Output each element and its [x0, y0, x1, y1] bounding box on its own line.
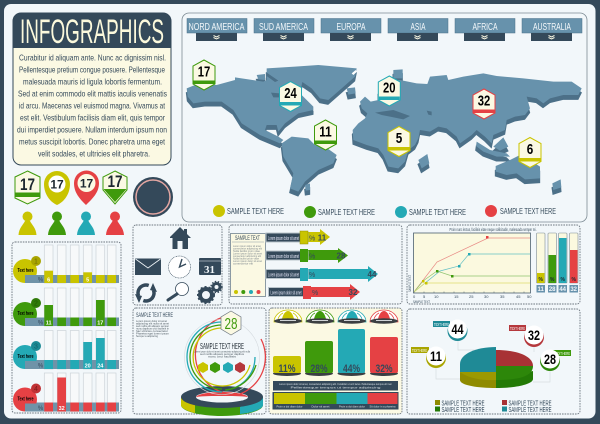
panel: bar rows	[12, 242, 121, 413]
region tabs: AFRICA	[472, 22, 498, 33]
map pin 24	[280, 82, 302, 112]
chart axis labels	[407, 275, 532, 304]
row 2 green: 17	[97, 320, 103, 326]
percent columns	[536, 233, 578, 293]
map pin 20	[378, 76, 400, 106]
ring panel text: Lorem ipsum dolor sit amet	[136, 319, 167, 323]
concentric rings	[184, 318, 265, 394]
caption strip: Proin a dui diam dolor	[276, 404, 303, 408]
intro paragraph: Pellentesque pretium congue posuere. Pellentesque	[19, 64, 165, 74]
chart axis labels: 0	[413, 294, 416, 299]
ring caption: Lorem ipsum dolor sit amet consectetur adipiscing elit nulla	[194, 350, 250, 354]
ring panel text: sed mollis elit aliquam semper	[136, 324, 169, 328]
row 1 yellow: %	[38, 278, 44, 284]
caption strip: Sit dolor in a pharetra	[370, 404, 396, 408]
caption strip: Dolor sit amet	[312, 404, 330, 408]
cylinders	[273, 329, 398, 376]
cylinders: 28%	[310, 363, 328, 375]
row 2 green: %	[38, 320, 44, 326]
percent columns: 11	[538, 287, 545, 293]
caption strip: Pellentesque tempus ut tempor adipiscing	[290, 386, 381, 390]
connector lines	[436, 341, 550, 382]
arrow 11: Lorem ipsum dolor sit amet	[268, 236, 299, 242]
map pin 17	[193, 60, 215, 90]
row 1 yellow: 5	[86, 278, 89, 284]
ring panel text: Semper a adipiscing	[136, 334, 158, 338]
row 2 green: Text here	[18, 311, 34, 317]
icon: teardrop badge yellow	[44, 171, 70, 205]
arrow 32: %	[312, 290, 318, 297]
map pin 6	[519, 138, 541, 168]
icon: person yellow	[18, 212, 36, 235]
icon: hexagon badge green: 17	[20, 175, 35, 194]
arrow 28: Lorem ipsum dolor sit amet	[268, 254, 299, 260]
row 4 red: 32	[59, 406, 65, 412]
icon: hexagon badge green	[15, 171, 40, 204]
arrow 28	[266, 248, 348, 263]
map pin 5	[388, 126, 410, 156]
3d disc	[181, 386, 263, 416]
ring panel text: nunc dapibus orci facilisis in	[136, 326, 169, 330]
ring hexagons	[198, 362, 245, 373]
arrow 11	[266, 229, 330, 245]
chart axis labels: SAMPLE TEXT	[413, 299, 430, 304]
intro paragraph: dui imperdiet posuere. Nullam interdum ipsum non	[17, 124, 167, 134]
cylinders: 44%	[343, 363, 360, 375]
caption strip	[272, 381, 398, 410]
cylinders: 32%	[376, 363, 393, 375]
chart axis labels: 25	[469, 294, 474, 299]
row 4 red: %	[38, 406, 44, 412]
chart axis labels: 10	[434, 294, 439, 299]
row 3 teal: %	[38, 364, 44, 370]
row 4 red	[13, 373, 119, 412]
arrow 44: 44	[368, 270, 377, 279]
panel: pie chart	[407, 309, 580, 414]
icon: clock	[168, 256, 190, 278]
arrow 11: %	[309, 236, 315, 242]
chart axis labels: 15	[454, 294, 459, 299]
pie legend: SAMPLE TEXT HERE	[508, 405, 552, 414]
note card	[230, 234, 266, 296]
eurasia, africa, australia	[352, 69, 582, 194]
map pin 11	[314, 120, 336, 150]
row 3 teal: Text here	[18, 354, 34, 360]
map pin 32	[473, 89, 495, 119]
pie pin 32: 32	[528, 327, 540, 343]
percent columns: %	[571, 277, 576, 283]
pie pin 11	[411, 346, 446, 368]
panel: ring chart	[133, 308, 266, 416]
row 2 green: 11	[46, 320, 52, 326]
panel: world map	[182, 13, 587, 222]
pie legend	[435, 398, 552, 414]
icon: map pin badge red	[74, 171, 99, 205]
title: INFOGRAPHICS	[20, 13, 164, 51]
intro paragraph: velit sodales, et ultricies elit pharetra.	[38, 148, 150, 158]
region tabs: SUD AMERICA	[259, 22, 308, 33]
intro paragraph	[17, 52, 167, 158]
arrow 32	[268, 284, 360, 300]
row 2 green	[13, 288, 119, 326]
ring caption: sed mollis aliquam semper dapibus	[200, 352, 245, 356]
domes	[274, 310, 398, 324]
arrow 44	[266, 266, 378, 282]
note card: Lorem ipsum dolor sit amet	[233, 259, 262, 263]
world map continents	[186, 65, 582, 196]
region tabs	[187, 18, 582, 41]
ring panel text: adipiscing elit nulla sit amet	[136, 322, 169, 326]
icon: home	[170, 227, 191, 249]
ring panel text: hac ultricies consectetur	[136, 329, 168, 333]
icon: person teal	[77, 212, 95, 235]
chart axis labels: 30	[484, 294, 489, 299]
row 1 yellow	[13, 245, 119, 284]
arrow 44: Lorem ipsum dolor sit amet	[268, 272, 299, 278]
intro paragraph: malesuada mauris id ligula lobortis fermentum.	[23, 76, 162, 86]
3d pie	[460, 347, 533, 388]
pie pin 28	[540, 350, 571, 371]
note card: consectetur elit	[233, 262, 253, 266]
pie pin 11: 11	[430, 348, 442, 364]
chart heading: Proin nunc lectus, facilisis vitae neque sollicitudin, malesuada semper mi.	[450, 227, 536, 232]
region tabs: ASIA	[410, 22, 426, 33]
map legend	[213, 205, 556, 218]
icon: refresh	[135, 283, 157, 303]
pie pin 44: 44	[452, 321, 464, 337]
ring panel heading: SAMPLE TEXT HERE	[136, 312, 173, 319]
chart axis labels: 50	[527, 294, 532, 299]
percent columns: 32	[570, 287, 578, 293]
intro paragraph: est elit. Vestibulum facilisis diam elit, quis tempor	[20, 112, 165, 122]
percent columns: %	[538, 277, 543, 283]
pie legend: SAMPLE TEXT HERE	[442, 405, 484, 414]
pie legend: SAMPLE TEXT HERE	[508, 398, 552, 408]
note card: SAMPLE TEXT	[235, 236, 260, 242]
percent columns: %	[560, 277, 565, 283]
caption strip: Proin a dui diam dolor	[339, 404, 365, 408]
row 3 teal: 24	[97, 364, 104, 370]
row 4 red: Text here	[18, 396, 34, 402]
map pin 20: 20	[383, 80, 396, 96]
ring caption: nunc orci facilisis	[208, 354, 237, 358]
row 2 green: 2	[34, 300, 38, 308]
percent columns: 28	[549, 287, 556, 293]
arrow 32: Lorem ipsum dolor sit amet	[270, 290, 302, 296]
region tabs: AUSTRALIA	[533, 22, 571, 33]
ring panel text	[136, 319, 169, 338]
cylinders: 11%	[278, 363, 296, 375]
row 1 yellow: Text here	[18, 268, 34, 274]
map legend: SAMPLE TEXT HERE	[500, 206, 556, 216]
intro paragraph: Sed at enim commodo elit mattis iaculis venenatis	[18, 88, 167, 98]
note card: consectetur adipiscing elit	[233, 254, 261, 258]
chart axis labels: SAMPLE TEXT	[407, 275, 412, 292]
region tabs: EUROPA	[336, 22, 366, 33]
pie legend: SAMPLE TEXT HERE	[442, 398, 484, 408]
chart axis labels: 45	[516, 294, 521, 299]
icon: map pin badge red: 17	[80, 176, 93, 190]
region tabs: NORD AMERICA	[188, 22, 245, 33]
map pin 32: 32	[478, 92, 490, 110]
percent columns: 44	[559, 287, 567, 293]
line plot	[414, 233, 530, 293]
note card: Nulla facilisi proin vitae	[233, 256, 259, 260]
arrow 28: 28	[337, 252, 346, 260]
icon: envelope	[135, 258, 161, 275]
ring caption	[194, 350, 250, 358]
map pin 17: 17	[198, 64, 210, 80]
map legend: SAMPLE TEXT HERE	[318, 207, 375, 217]
arrow 28: %	[309, 254, 315, 260]
map pin 24: 24	[284, 85, 297, 102]
map pin 6: 6	[527, 141, 533, 158]
intro paragraph: metus suscipit lobortis. Donec pharetra urna eget	[19, 136, 165, 146]
caption strip: Lorem ipsum dolor sit amet, consectetur adipiscing elit. Curabitur ut orci lacus. Pellentesque tempus elit non	[279, 382, 392, 386]
icon: person green	[48, 212, 66, 235]
pie pin 44: TEXT HERE	[434, 322, 449, 327]
icon: teardrop badge yellow: 17	[50, 178, 64, 192]
arrow 44: %	[309, 272, 315, 279]
icon: hexagon triangle badge green: 17	[108, 172, 122, 191]
intro paragraph: id arcu. Maecenas vel euismod magna. Vivamus at	[19, 100, 165, 110]
panel: line chart	[407, 225, 580, 304]
pie pin 32	[509, 325, 544, 347]
map legend: SAMPLE TEXT HERE	[409, 207, 466, 217]
map pin 5: 5	[396, 130, 402, 147]
ring panel text: Pharetra eget lorem ipsum	[136, 332, 169, 336]
note card: Lorem ipsum dolor sit amet	[233, 252, 262, 256]
pie pin 44	[433, 320, 468, 341]
arrow 32: 32	[349, 288, 358, 297]
row 3 teal: 20	[85, 364, 91, 370]
icon: calendar: 31	[204, 264, 215, 276]
row 4 red: 4	[34, 386, 38, 393]
row 3 teal: 3	[34, 344, 38, 350]
icon: gears	[198, 282, 222, 303]
icon: magnifier	[168, 282, 188, 300]
chart axis labels: 5	[423, 294, 426, 299]
note card: Nulla facilisi proin vitae	[233, 249, 260, 253]
title block	[13, 13, 171, 165]
pie pin 11: TEXT HERE	[412, 348, 427, 353]
row 3 teal	[13, 330, 119, 370]
americas	[186, 65, 357, 196]
hexagon 28: 28	[224, 316, 238, 333]
note card: consectetur adipiscing elit	[233, 246, 262, 250]
row 1 yellow: 6	[47, 278, 50, 284]
intro paragraph: Curabitur id aliquam ante. Nunc ac dignissim nisl.	[19, 52, 166, 62]
panel: icons	[133, 225, 222, 305]
panel: cylinder bars	[269, 308, 402, 414]
panel: arrows	[229, 225, 402, 304]
icon: round dark badge	[133, 177, 173, 217]
map pin 11: 11	[319, 124, 332, 140]
percent columns: %	[550, 277, 555, 283]
icon: person red	[106, 212, 124, 235]
pie pin 32: TEXT HERE	[510, 326, 525, 331]
chart axis labels: 35	[500, 294, 505, 299]
map legend: SAMPLE TEXT HERE	[227, 206, 284, 216]
ring title: SAMPLE TEXT HERE	[200, 342, 244, 351]
arrow 11: 11	[318, 234, 327, 242]
pie pin 28: 28	[544, 351, 556, 367]
pie pin 28: TEXT HERE	[555, 351, 570, 356]
icon: hexagon triangle badge green	[103, 171, 127, 204]
row 1 yellow: 1	[34, 258, 38, 266]
note card: Lorem ipsum dolor sit amet	[233, 244, 261, 248]
